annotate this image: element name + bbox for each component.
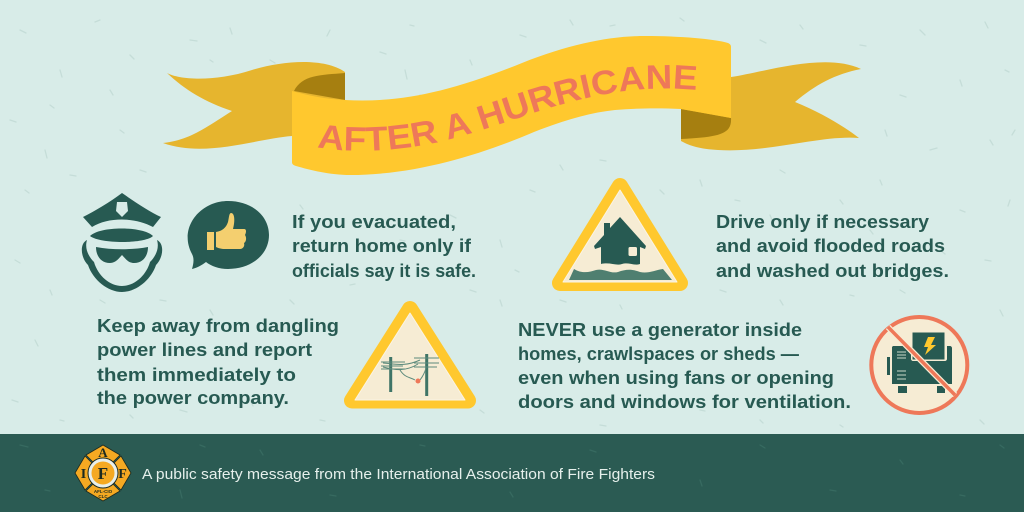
text: power line advice (97, 315, 339, 408)
spark (416, 378, 420, 384)
house (594, 217, 646, 265)
text: power line advice: power lines and report (97, 339, 312, 360)
ribbon main band (292, 36, 731, 175)
footer band (0, 434, 1024, 512)
text: driving advice: Drive only if necessary (716, 211, 930, 232)
text: generator warning: doors and windows for ventilation. (518, 391, 851, 412)
text: driving advice: and avoid flooded roads (716, 235, 945, 256)
IAFF logo: AFL-CIO (94, 489, 113, 494)
IAFF logo (75, 445, 131, 501)
title text: AFTER A HURRICANE (318, 65, 696, 150)
footer text: A public safety message from the International Association of Fire Fighters (142, 467, 655, 483)
text: generator warning: even when using fans or opening (518, 367, 834, 388)
text: evacuation advice (292, 211, 476, 281)
text: evacuation advice: If you evacuated, (292, 211, 456, 232)
icon: flood warning triangle (560, 186, 680, 283)
flood water (569, 269, 672, 280)
left ribbon tail (163, 62, 345, 149)
ribbon fold right (681, 109, 731, 139)
ribbon fold left (294, 73, 345, 100)
text: power line advice: the power company. (97, 387, 289, 408)
IAFF logo: F (118, 467, 127, 482)
text: evacuation advice: return home only if (292, 235, 472, 256)
right ribbon tail (681, 62, 861, 150)
icon: no generator sign (871, 317, 967, 413)
poles (391, 354, 427, 396)
icon: speech bubble with thumbs up (188, 201, 269, 269)
IAFF logo: CLC (98, 494, 108, 499)
icon: police officer (82, 193, 162, 292)
title ribbon (163, 36, 861, 175)
IAFF logo: A (98, 445, 108, 460)
text: power line advice: Keep away from dangling (97, 315, 339, 336)
text: driving advice: and washed out bridges. (716, 260, 949, 281)
text: generator warning: homes, crawlspaces or sheds — (518, 343, 799, 364)
text: generator warning (518, 319, 851, 412)
IAFF logo: I (81, 467, 86, 482)
text: power line advice: them immediately to (97, 364, 296, 385)
icon: downed power line triangle (352, 309, 468, 400)
text: generator warning: NEVER use a generator inside (518, 319, 802, 340)
IAFF logo: F (98, 464, 108, 483)
wires (381, 358, 439, 380)
text: driving advice (716, 211, 949, 281)
text: evacuation advice: officials say it is safe. (292, 260, 476, 281)
